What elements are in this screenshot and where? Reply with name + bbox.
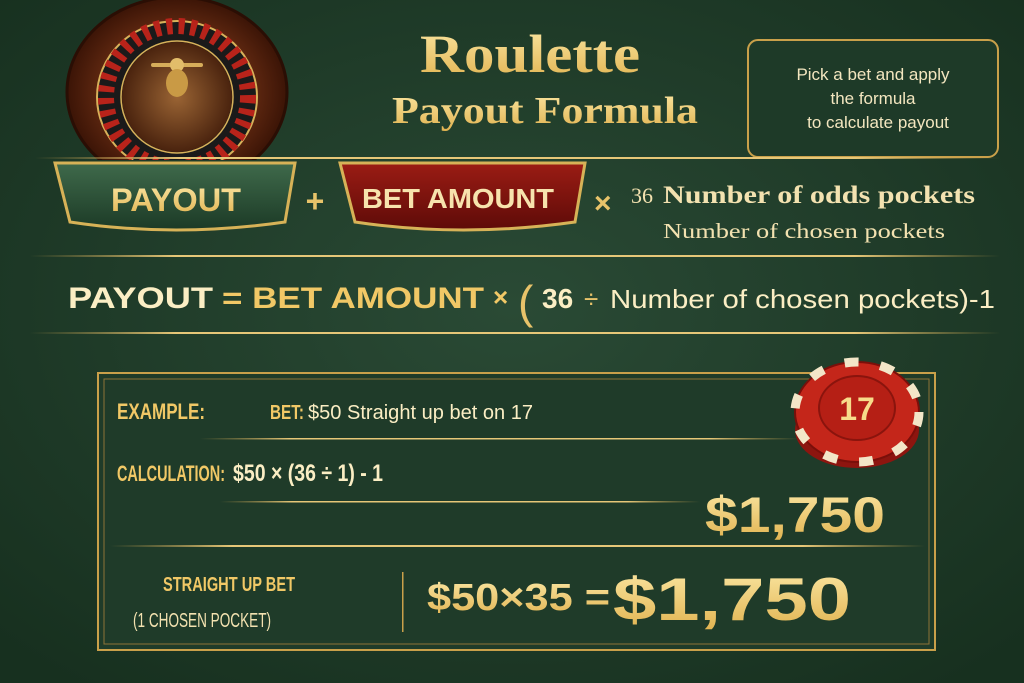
payout banner: PAYOUT: [111, 182, 241, 218]
example panel: [98, 373, 935, 650]
calculation line: CALCULATION:: [117, 461, 225, 486]
main formula: PAYOUT: [68, 282, 213, 315]
straight up label: STRAIGHT UP BET: [163, 574, 295, 596]
fraction text: 36: [631, 183, 653, 208]
straight up label: [133, 574, 295, 632]
example line: $50 Straight up bet on 17: [308, 402, 533, 424]
calculation line: [117, 460, 383, 487]
main formula: (: [518, 276, 534, 328]
fraction text: Number of chosen pockets: [663, 219, 945, 243]
payout banner: [55, 163, 295, 230]
straight up result: $1,750: [613, 566, 851, 633]
icon: poker chip 17: [795, 362, 919, 468]
title: [392, 24, 698, 132]
straight up result: $50×35 =: [427, 577, 610, 619]
calculation line: $50 × (36 ÷ 1) - 1: [233, 460, 383, 487]
info box: Pick a bet and apply: [796, 65, 950, 84]
info box: [748, 40, 998, 157]
main formula: [68, 276, 995, 328]
main formula: ÷: [584, 284, 598, 314]
main formula: Number of chosen pockets)-1: [610, 284, 995, 314]
main formula: ×: [493, 282, 508, 312]
icon: poker chip 17: 17: [839, 391, 875, 427]
info box: the formula: [830, 89, 916, 108]
plus sign: +: [306, 183, 324, 219]
title: Payout Formula: [392, 90, 698, 132]
bet amount banner: [340, 163, 585, 230]
example line: BET:: [270, 402, 304, 424]
info box: to calculate payout: [807, 113, 949, 132]
fraction text: Number of odds pockets: [663, 182, 975, 209]
fraction text: [594, 182, 975, 243]
example line: EXAMPLE:: [117, 399, 205, 424]
result: $1,750: [705, 487, 885, 543]
example line: [117, 399, 533, 424]
title: Roulette: [420, 24, 640, 84]
roulette wheel: [66, 0, 288, 160]
straight up result: [427, 566, 851, 633]
fraction text: ×: [594, 187, 612, 220]
main formula: 36: [542, 283, 573, 314]
straight up label: (1 CHOSEN POCKET): [133, 610, 271, 632]
bet amount banner: BET AMOUNT: [362, 183, 554, 214]
main formula: = BET AMOUNT: [222, 282, 484, 315]
